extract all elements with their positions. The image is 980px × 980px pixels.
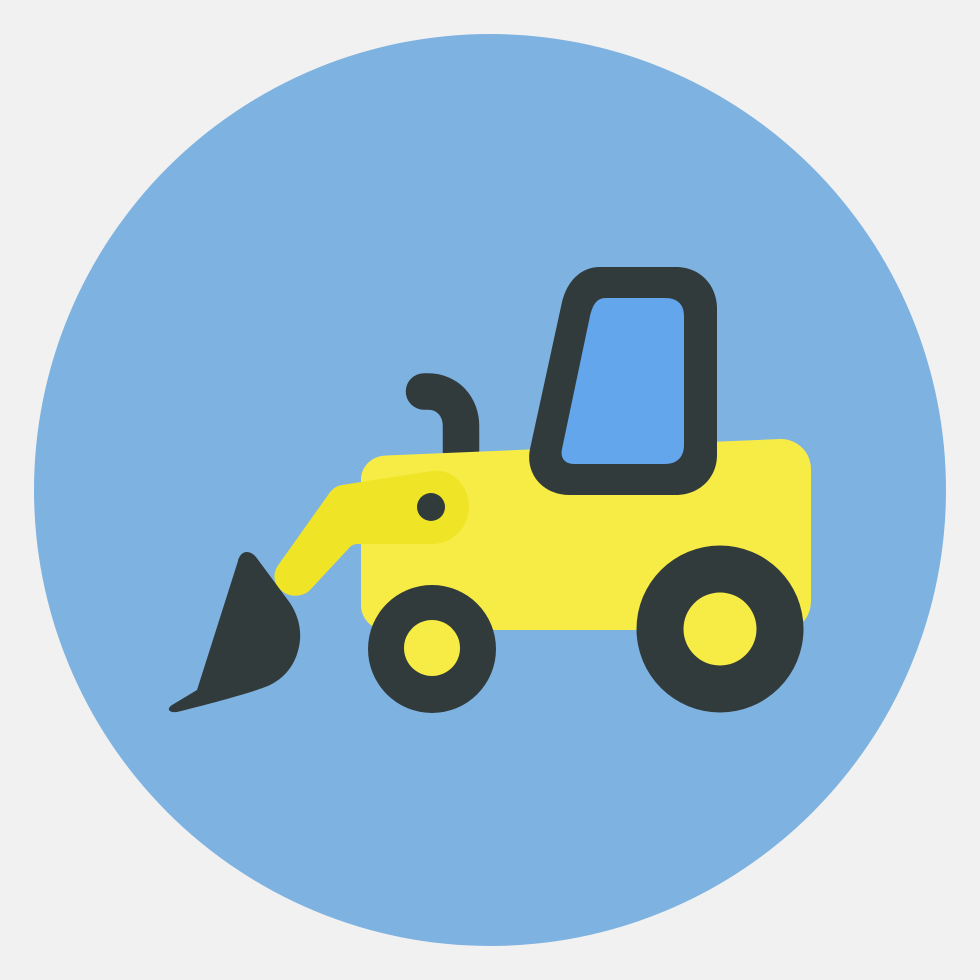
loader vehicle [169,267,811,713]
cab window [562,298,684,464]
exhaust pipe [424,392,461,460]
cab frame [529,267,717,495]
loader arm [274,471,469,596]
front wheel [368,585,496,713]
yellow body [361,439,811,630]
arm pivot [417,493,445,521]
rear wheel [636,546,804,712]
bucket [169,552,300,712]
